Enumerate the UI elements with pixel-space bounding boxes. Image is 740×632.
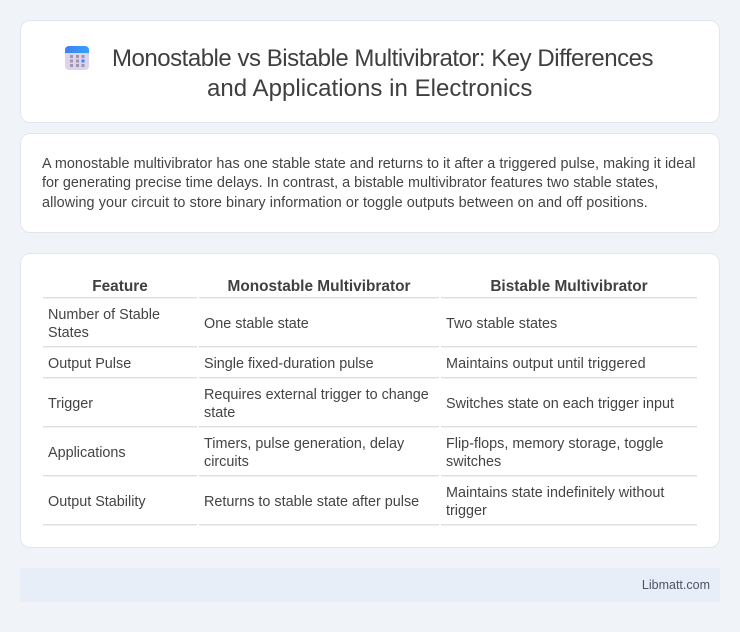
title: and Applications in Electronics: [207, 74, 532, 102]
text: One stable state: [204, 316, 309, 332]
text: Applications: [48, 445, 126, 461]
text: Output Pulse: [48, 356, 131, 372]
text: circuits: [204, 454, 249, 470]
text: Single fixed-duration pulse: [204, 356, 374, 372]
icon: calendar grid: [65, 46, 89, 70]
column headers: [92, 278, 648, 295]
text: Feature: [92, 278, 148, 295]
text: States: [48, 325, 89, 341]
row: trigger: [48, 387, 674, 421]
text: Output Stability: [48, 494, 146, 510]
text: state: [204, 405, 235, 421]
intro text: [42, 156, 696, 211]
header panel: [20, 20, 720, 123]
intro text: allowing your circuit to store binary information or toggle outputs between on and off positions.: [42, 195, 648, 211]
intro text: A monostable multivibrator has one stable state and returns to it after a triggered pulse, making it ideal: [42, 156, 696, 172]
text: Maintains state indefinitely without: [446, 485, 664, 501]
text: Flip-flops, memory storage, toggle: [446, 436, 664, 452]
intro panel: [20, 133, 720, 233]
text: Number of Stable: [48, 307, 160, 323]
text: trigger: [446, 503, 487, 519]
row: output stability: [48, 485, 664, 519]
text: Maintains output until triggered: [446, 356, 646, 372]
text: Monostable Multivibrator: [228, 278, 410, 295]
text: Two stable states: [446, 316, 557, 332]
row: applications: [48, 436, 664, 470]
title: [112, 45, 653, 102]
text: Timers, pulse generation, delay: [204, 436, 404, 452]
text: Requires external trigger to change: [204, 387, 429, 403]
text: switches: [446, 454, 501, 470]
text: Trigger: [48, 396, 93, 412]
footer bar: [20, 568, 720, 602]
intro text: for generating precise time delays. In contrast, a bistable multivibrator features two stable states,: [42, 175, 658, 191]
text: Bistable Multivibrator: [490, 278, 648, 295]
footer text: Libmatt.com: [642, 578, 710, 592]
panel: comparison table: [20, 253, 720, 548]
text: Returns to stable state after pulse: [204, 494, 419, 510]
row: output pulse: [48, 356, 646, 372]
text: Switches state on each trigger input: [446, 396, 674, 412]
title: Monostable vs Bistable Multivibrator: Key Differences: [112, 45, 653, 72]
row: number of stable states: [48, 307, 557, 341]
